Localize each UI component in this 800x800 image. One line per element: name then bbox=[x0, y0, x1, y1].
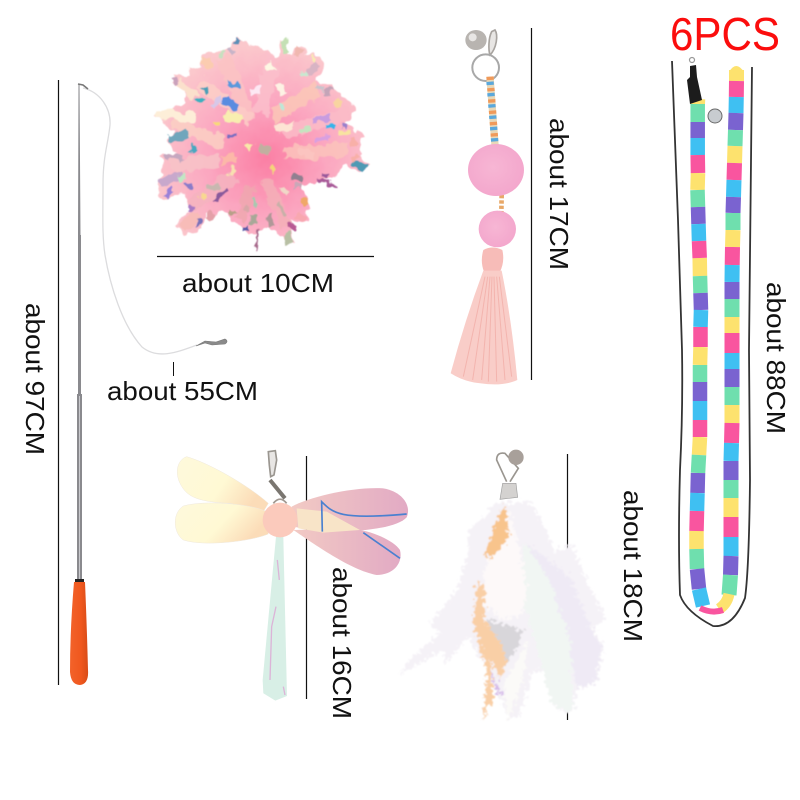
toy: iridescent sequin ball bbox=[155, 38, 370, 252]
bell bbox=[465, 30, 487, 50]
tail ribbons bbox=[263, 537, 287, 701]
ribbon lilac marks bbox=[270, 560, 285, 695]
left strand: green stripes bbox=[696, 104, 700, 569]
tassel knot bbox=[482, 247, 503, 272]
string clip bbox=[196, 339, 227, 346]
black end cap bbox=[687, 65, 702, 104]
purple accent bbox=[490, 670, 502, 697]
rod tip bbox=[78, 84, 88, 89]
label: about 97CM: about 97CM bbox=[20, 303, 50, 455]
orange feather upper bbox=[485, 505, 509, 560]
heading: 6PCS: 6PCS bbox=[670, 8, 780, 60]
dimension line: ball bbox=[157, 256, 374, 258]
grey shadow bbox=[488, 620, 523, 670]
pale radial lobes bbox=[170, 57, 347, 227]
label: about 55CM: about 55CM bbox=[107, 376, 258, 406]
wing: right lower bbox=[293, 528, 401, 575]
large pom-pom bbox=[468, 144, 524, 196]
label: about 18CM: about 18CM bbox=[618, 490, 648, 642]
string bbox=[83, 88, 197, 354]
left strand: blue stripes bbox=[697, 138, 703, 606]
bead ring bbox=[273, 499, 287, 503]
telescopic rod with orange handle bbox=[58, 80, 227, 685]
carabiner clip bbox=[489, 30, 497, 55]
label: about 17CM: about 17CM bbox=[544, 118, 574, 270]
handle collar bbox=[75, 579, 84, 582]
right strand: blue stripes bbox=[731, 97, 736, 556]
braided cord bbox=[490, 77, 495, 145]
cream wing stripe bbox=[297, 508, 360, 533]
ring bbox=[472, 54, 499, 81]
cord blue flecks bbox=[490, 82, 495, 145]
bottom pink bend bbox=[700, 608, 723, 612]
swivel clip bbox=[268, 451, 277, 477]
toy: feather bundle with bell bbox=[398, 450, 607, 720]
right strand: rounded top bbox=[729, 66, 744, 72]
left strand: purple stripes bbox=[697, 122, 701, 589]
dimension line: rod bbox=[58, 80, 60, 685]
wing: right upper bbox=[292, 488, 408, 531]
label: about 10CM: about 10CM bbox=[182, 268, 334, 298]
outer sequin strips bbox=[158, 40, 367, 252]
thread shading bbox=[463, 277, 512, 382]
wire loop bbox=[497, 453, 518, 482]
tassel threads bbox=[451, 271, 517, 384]
orange feather lower bbox=[473, 580, 507, 720]
small pom-pom bbox=[479, 211, 516, 247]
swivel chain bbox=[270, 480, 285, 498]
right strand: yellow stripes bbox=[731, 70, 736, 517]
bottom yellow bend bbox=[719, 594, 729, 609]
inner sequin strips bbox=[227, 82, 238, 87]
right strand: green stripes bbox=[729, 130, 736, 595]
dimension line: tassel bbox=[530, 28, 532, 380]
cord orange flecks bbox=[490, 77, 495, 145]
feather mass bbox=[398, 502, 607, 720]
toy: rainbow fabric strip with cord bbox=[672, 58, 752, 626]
ball base bbox=[155, 38, 370, 247]
bell highlight bbox=[469, 33, 477, 41]
white front feather bbox=[503, 640, 528, 720]
label: about 16CM: about 16CM bbox=[327, 567, 357, 719]
wing: left upper bbox=[177, 457, 268, 512]
lilac feather bbox=[527, 543, 602, 688]
black outer wire bbox=[672, 61, 752, 626]
mint feather bbox=[523, 540, 573, 710]
wing: left lower bbox=[175, 503, 268, 543]
toy: pom-pom tassel with bell bbox=[451, 30, 524, 384]
right strand: pink stripes bbox=[731, 81, 736, 537]
metal cap bbox=[500, 483, 518, 499]
left strand: pink stripes bbox=[696, 155, 700, 531]
rod shaft bbox=[77, 84, 82, 580]
blue wing veins bbox=[322, 502, 407, 558]
left strand: yellow stripes bbox=[696, 99, 700, 549]
label: about 88CM: about 88CM bbox=[761, 282, 791, 434]
white fluffy centre bbox=[483, 510, 527, 620]
dimension line: feather bbox=[566, 454, 568, 720]
right strand: purple stripes bbox=[730, 113, 736, 575]
cap ring bbox=[690, 58, 694, 62]
far white feathers bbox=[398, 502, 607, 718]
tick for string length bbox=[172, 362, 174, 376]
rod highlight bbox=[78, 396, 80, 580]
ball body with wavy strips bbox=[155, 38, 370, 252]
short cord bbox=[494, 195, 509, 213]
orange handle bbox=[70, 582, 88, 685]
toy: iridescent dragonfly bbox=[175, 451, 408, 701]
dimension line: dragonfly bbox=[306, 456, 308, 699]
bell bbox=[508, 450, 524, 465]
body bead bbox=[263, 503, 297, 537]
silver bell bbox=[708, 109, 722, 123]
